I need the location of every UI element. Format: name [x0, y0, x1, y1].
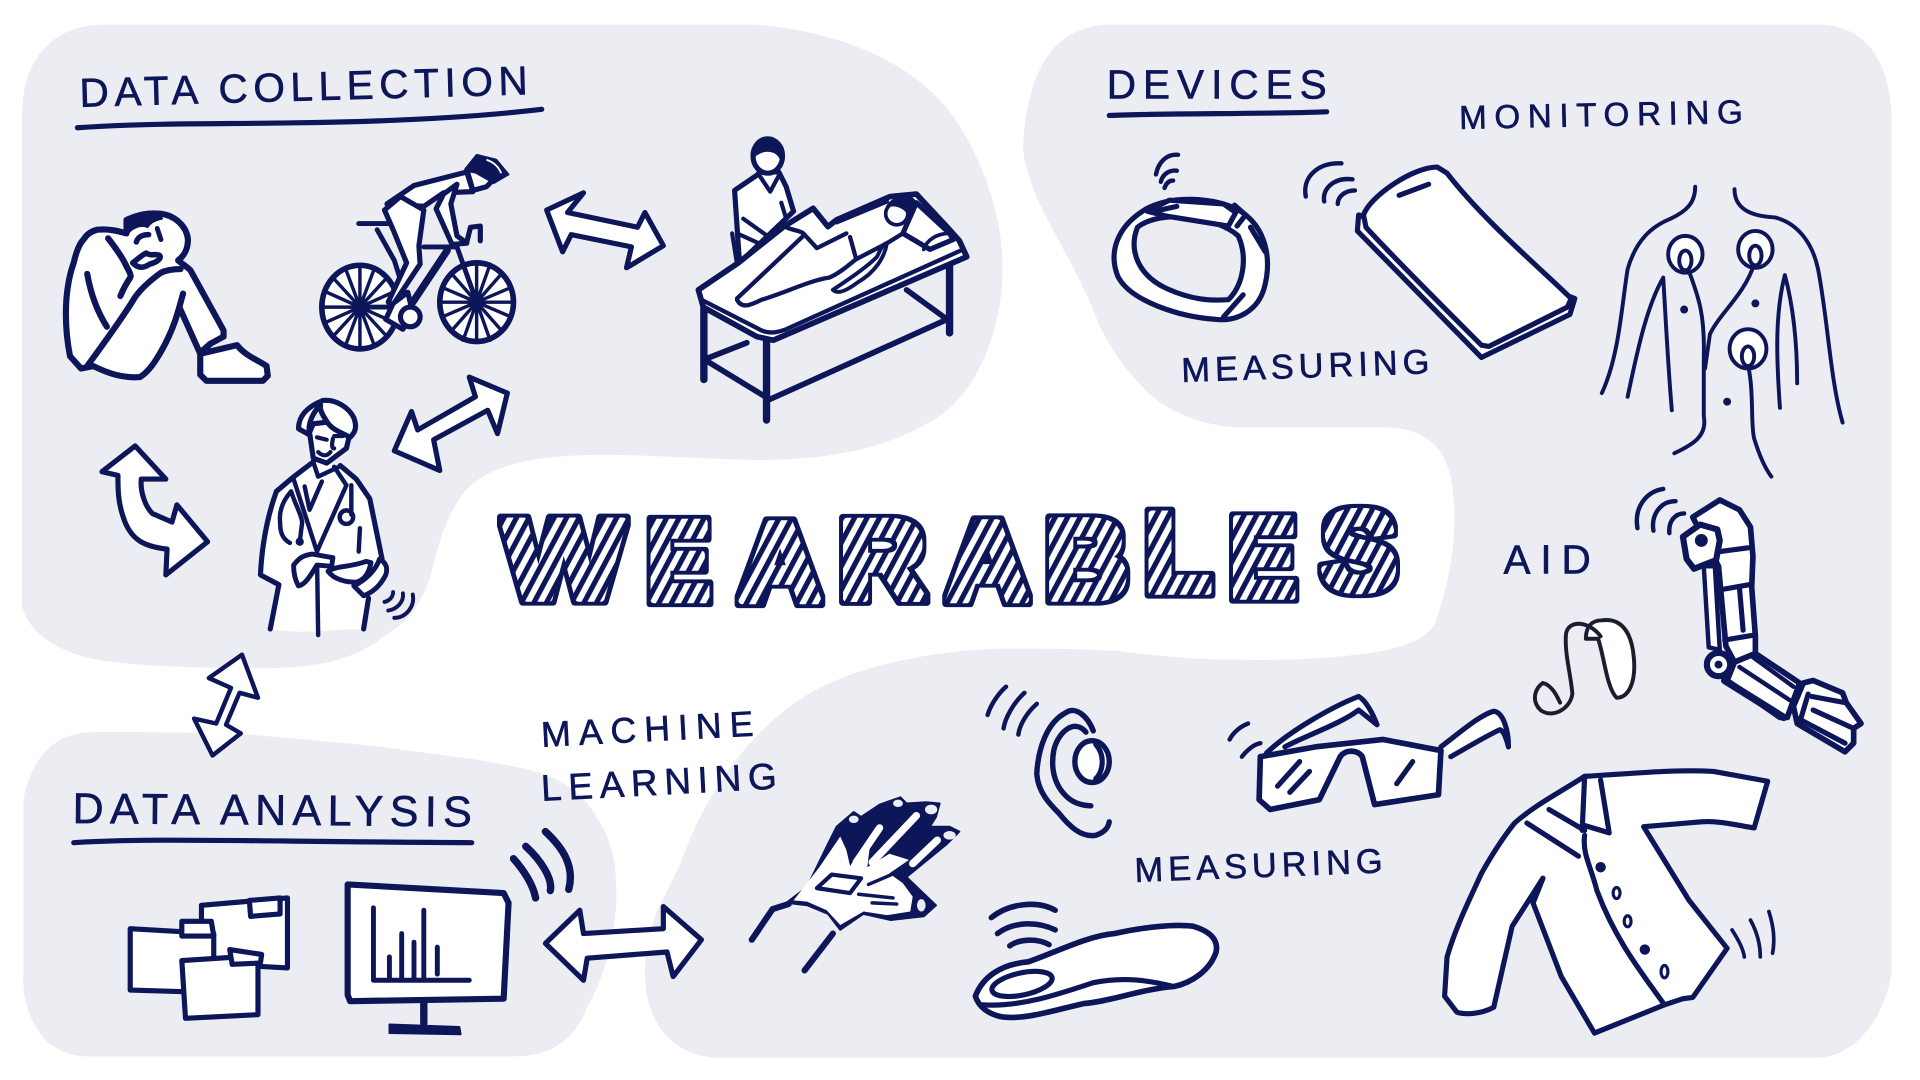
icon: monitor with bar chart	[348, 884, 509, 1034]
arrow: sad person to doctor	[102, 446, 208, 575]
title: wearables: W	[505, 497, 623, 622]
icon: smart glasses	[1230, 696, 1508, 810]
icon: smart jacket	[1445, 771, 1774, 1033]
arrow: cyclist to massage table	[547, 193, 663, 268]
icon: therapist and patient on massage table	[698, 139, 967, 420]
title: wearables: A	[740, 500, 821, 625]
heading: devices: DEVICES	[1107, 61, 1327, 107]
icon: torso with chest electrodes	[1602, 187, 1843, 477]
panel: devices and wearable types background	[645, 25, 1892, 1058]
icon: sad person sitting	[66, 213, 268, 381]
icon: prosthetic arm	[1637, 489, 1861, 752]
arrow: doctor to cyclist	[394, 377, 507, 470]
title: wearables: A	[947, 498, 1028, 623]
icon: signal waves from monitor	[513, 832, 570, 898]
title: wearables: L	[1145, 490, 1211, 615]
label: monitoring: MONITORING	[1459, 94, 1743, 137]
label: measuring (wearables): MEASURING	[1134, 842, 1383, 890]
heading: data collection: DATA COLLECTION	[79, 57, 528, 116]
label: measuring (devices): MEASURING	[1181, 343, 1430, 390]
title: wearables	[505, 489, 1397, 625]
label: machine learning	[540, 704, 778, 809]
icon: stack of folders	[130, 898, 287, 1018]
label: aid: AID	[1504, 537, 1591, 583]
title: wearables: B	[1045, 497, 1128, 622]
icon: smart ear with earbud	[988, 687, 1109, 836]
icon: cyclist on racing bicycle	[322, 155, 513, 349]
icon: sensor glove	[752, 797, 959, 970]
title: wearables: R	[839, 497, 925, 622]
icon: hearing aid	[1535, 620, 1634, 713]
arrow: data analysis to wearables	[545, 907, 701, 980]
heading: data analysis: DATA ANALYSIS	[72, 785, 472, 837]
arrow: data collection to data analysis	[194, 655, 258, 755]
label: machine learning: MACHINE	[540, 704, 754, 755]
panel: data analysis background	[23, 732, 616, 1056]
title: wearables: E	[1230, 495, 1296, 620]
icon: smart insole	[975, 904, 1217, 1017]
icon: doctor with stethoscope	[260, 400, 413, 635]
panel: data collection background	[22, 25, 1003, 668]
label: machine learning: LEARNING	[540, 756, 778, 809]
icon: smartphone	[1305, 163, 1575, 357]
title: wearables: E	[647, 498, 710, 623]
title: wearables: S	[1322, 489, 1397, 614]
icon: smart ring band	[1114, 155, 1267, 320]
